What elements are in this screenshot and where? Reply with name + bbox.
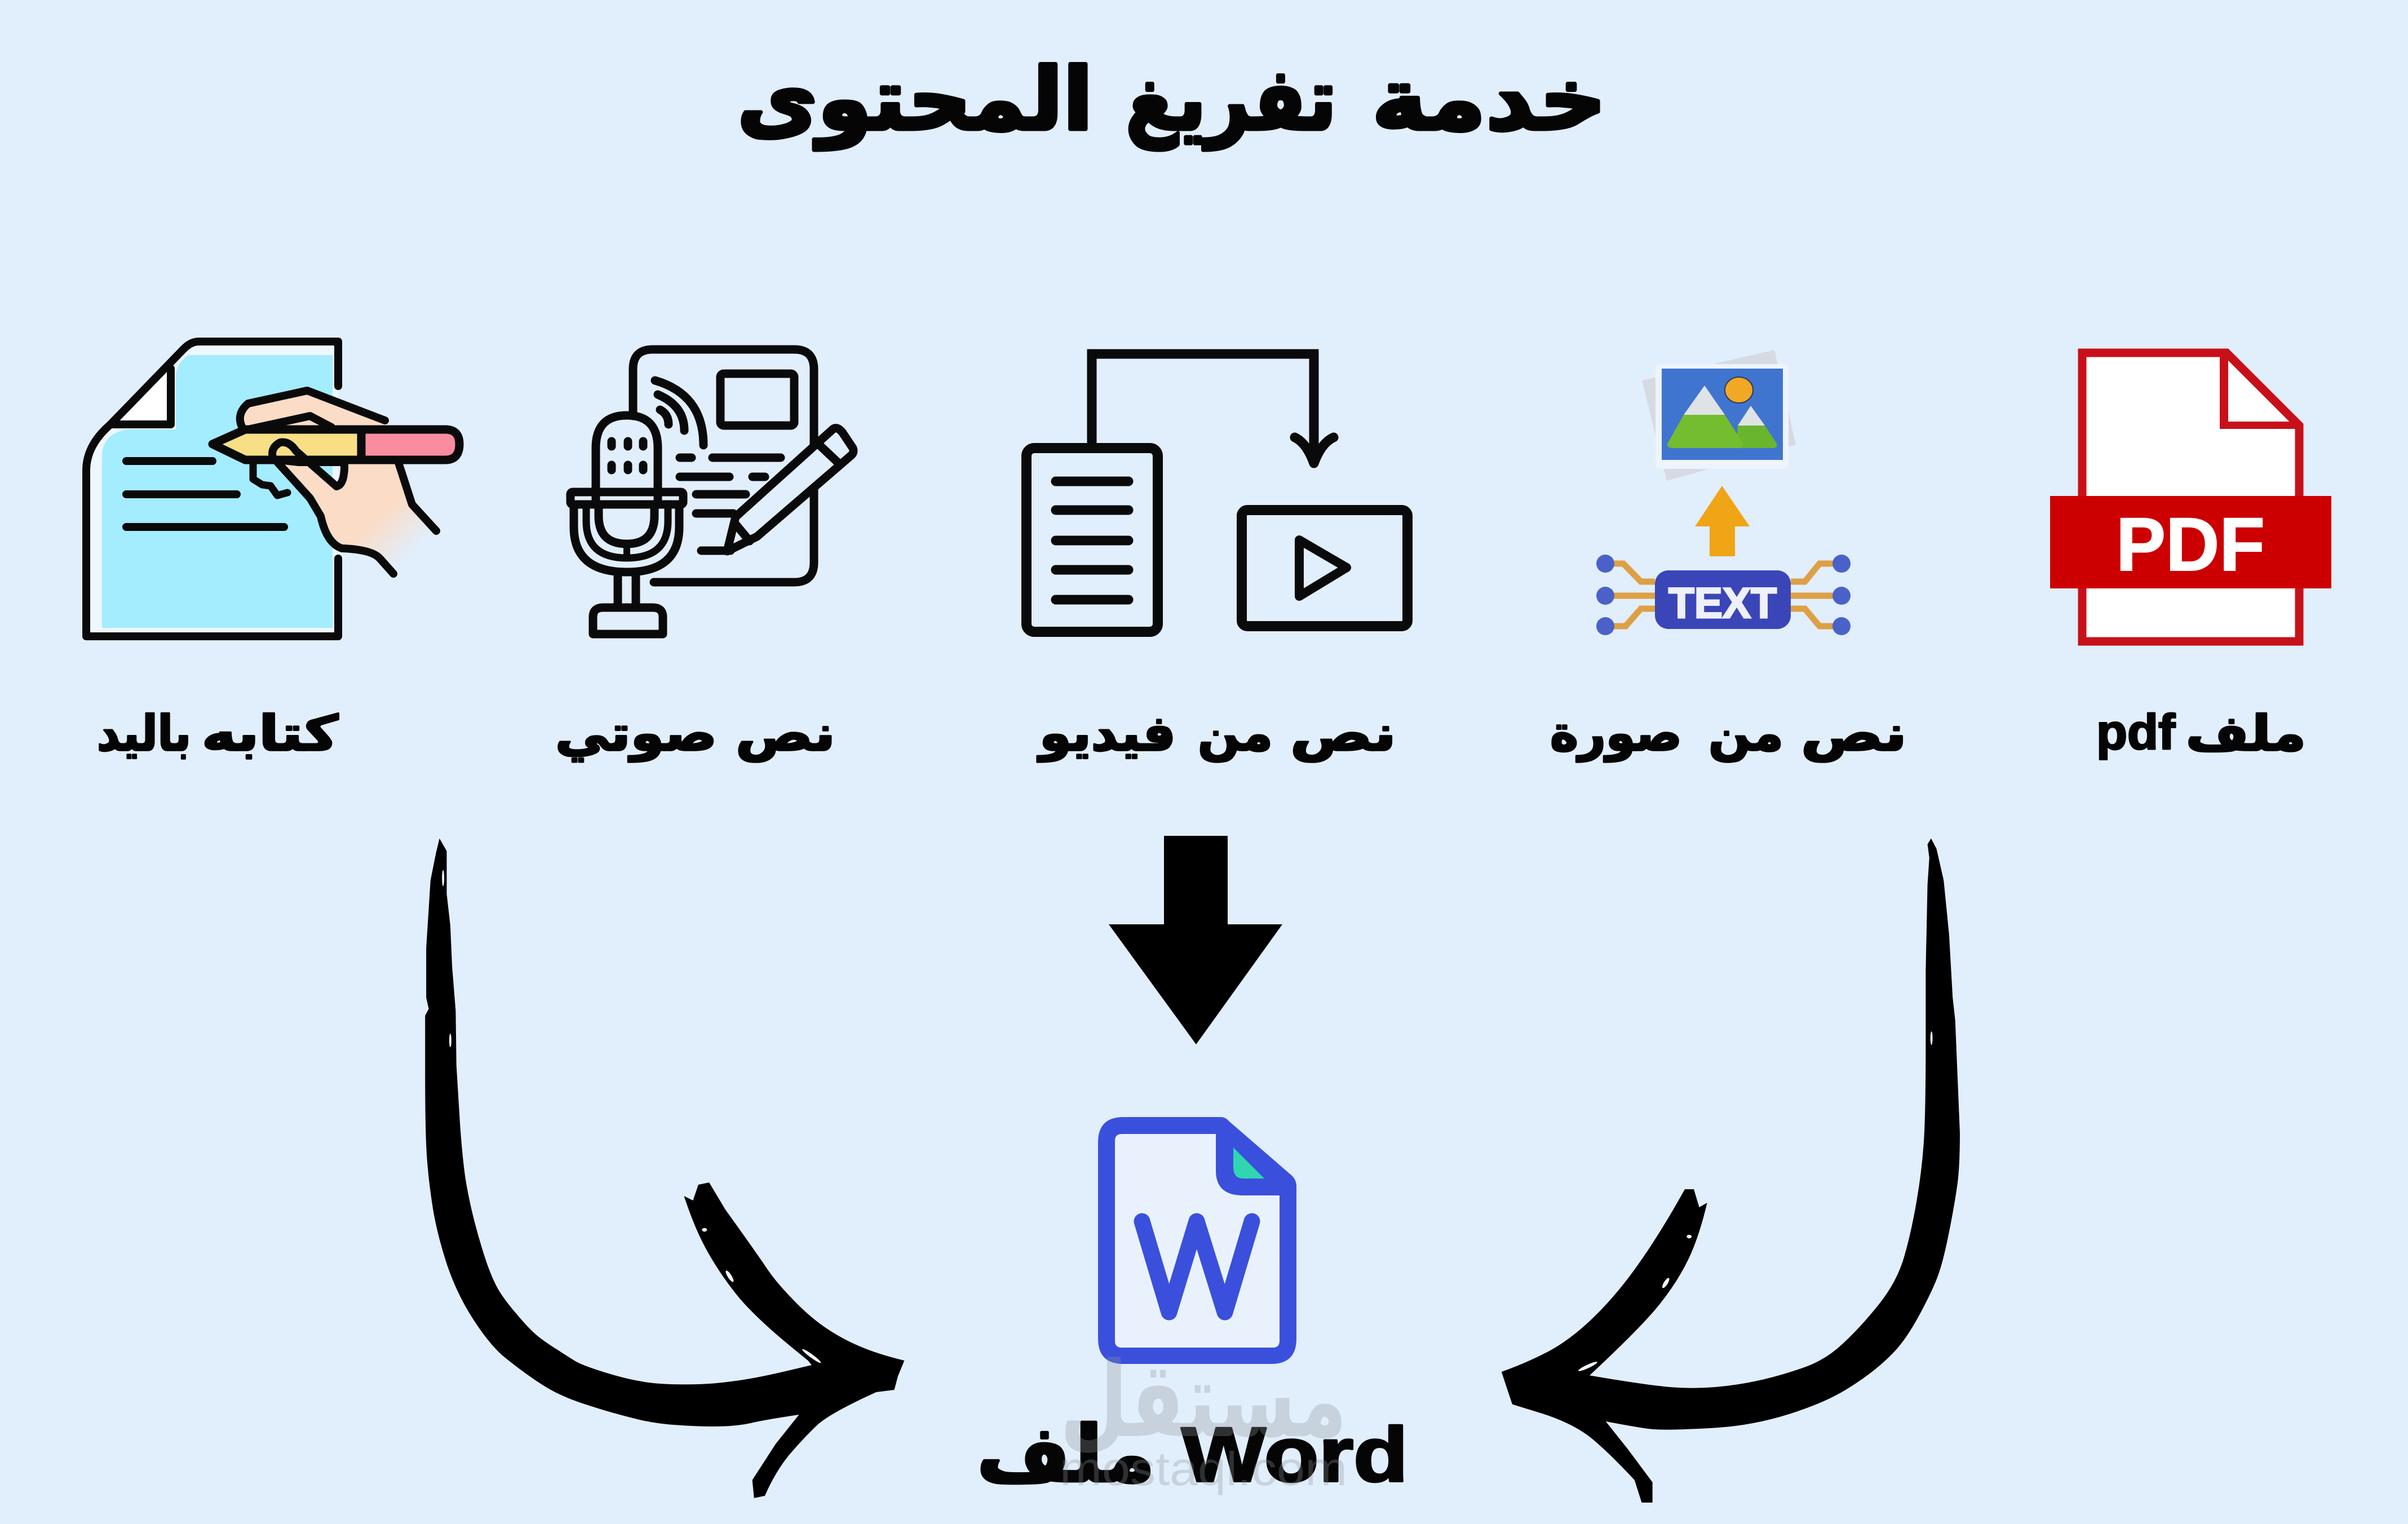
label: audio text: نص [736,706,835,762]
arrow: left curved [425,839,904,1498]
label: text from video: من [1198,706,1273,762]
pencil [727,428,853,551]
label: Word file: Word [1181,1412,1408,1498]
label: audio text [555,706,835,762]
watermark: مستقل [1060,1339,1347,1461]
title [737,50,1606,150]
label: text from video [1037,706,1396,762]
watermark [1060,1339,1347,1495]
label: text from image: صورة [1550,706,1682,762]
label: pdf file [2096,704,2306,762]
label: Word file: ملف [977,1409,1155,1500]
label: text from image: من [1708,706,1783,762]
label: text from image: نص [1801,706,1907,762]
label: pdf file: ملف [2186,706,2306,762]
label: handwriting: باليد [97,706,191,762]
watermark: mostaql.com [1060,1442,1347,1495]
icon: document to video [1026,354,1407,632]
icon: text to image [1596,350,1851,635]
text chip: TEXT [1668,579,1777,627]
label: text from video: فيديو [1037,706,1176,762]
finger [272,442,344,486]
icon: PDF file: PDF [2116,503,2265,587]
microphone [570,415,683,634]
arrow: center down [1109,836,1282,1044]
label: text from video: نص [1290,706,1396,762]
icon: handwriting on a document [86,342,459,636]
label: handwriting [97,706,339,762]
icon: Word file [1098,1117,1296,1364]
icon: microphone and transcript [570,349,853,634]
label: Word file [977,1409,1408,1500]
text chip [1655,570,1791,629]
hand [240,391,436,574]
orange arrow [1695,486,1750,556]
arrow: right curved [1502,839,1960,1503]
pencil [213,429,459,460]
label: audio text: صوتي [555,706,717,762]
photo stack [1642,350,1796,481]
label: pdf file: pdf [2096,704,2176,760]
title: تفريغ [1126,50,1336,150]
title: خدمة [1372,50,1606,149]
label: text from image [1550,706,1907,762]
circuit traces [1605,564,1842,626]
label: handwriting: كتابه [202,706,339,762]
circuit nodes [1596,555,1851,635]
icon: PDF file [2050,349,2331,641]
title: المحتوى [737,50,1093,150]
